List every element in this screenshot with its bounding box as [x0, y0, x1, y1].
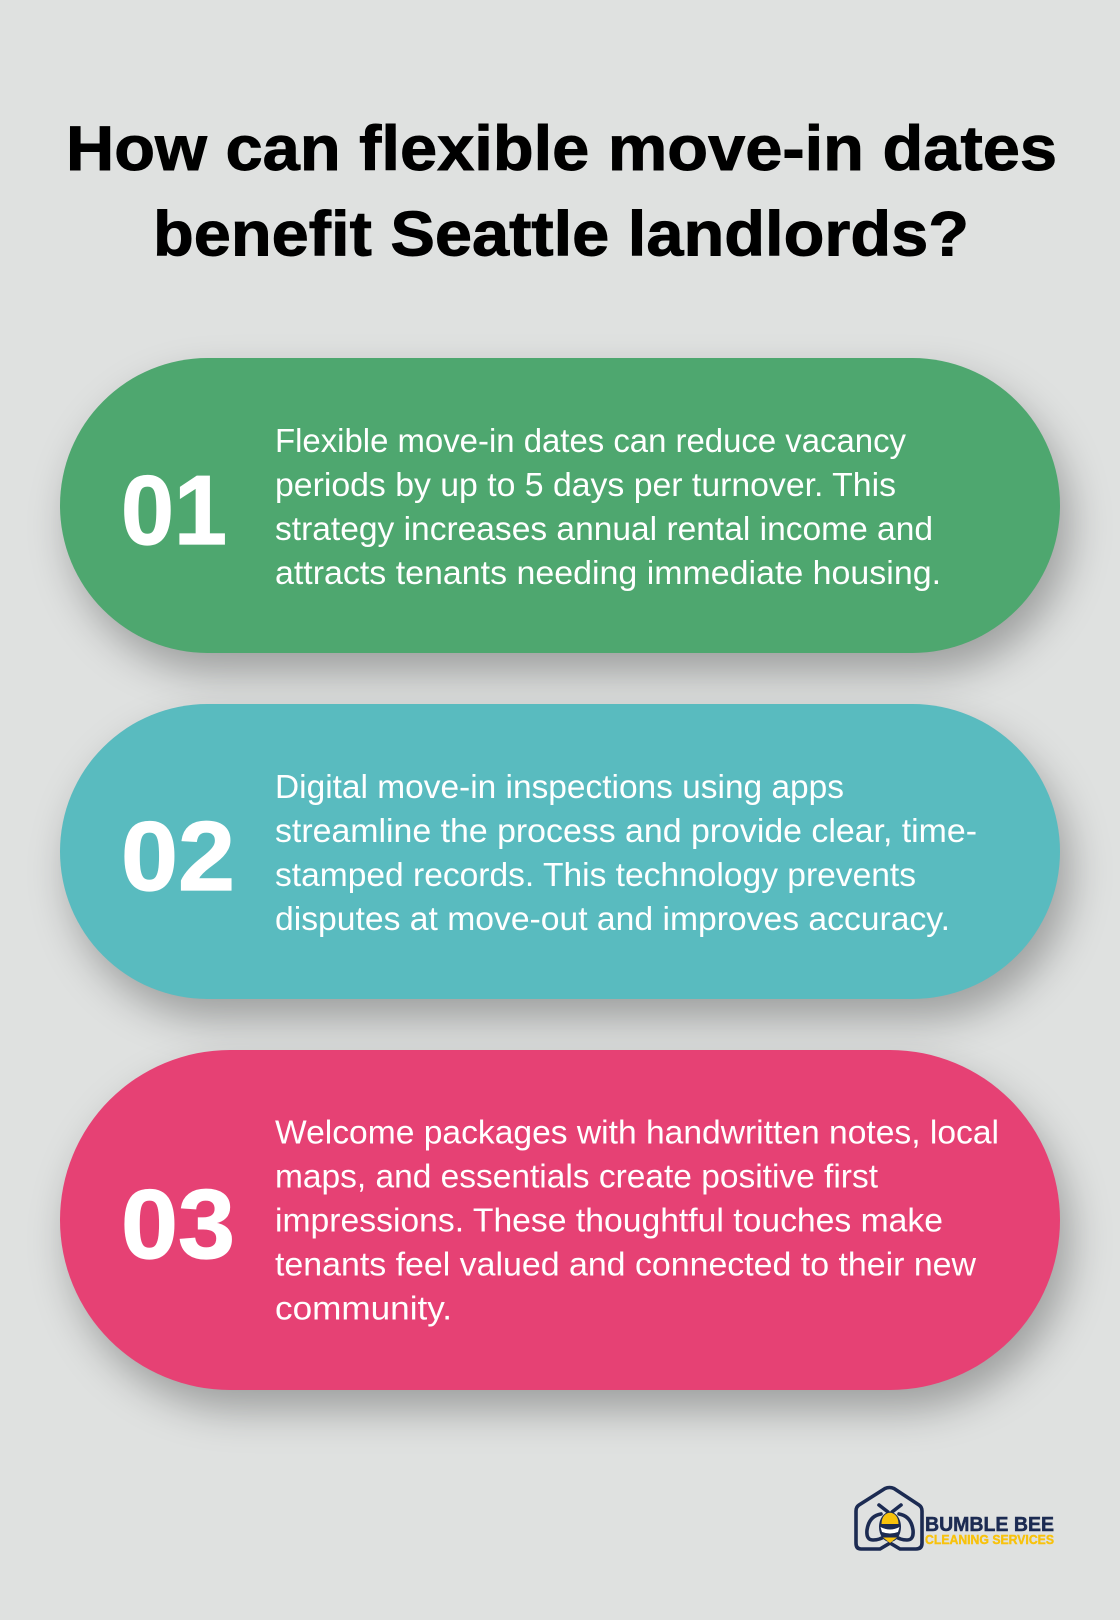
- text block: step 03: maps, and essentials create positive first: [275, 1158, 878, 1194]
- text block: step 01: strategy increases annual rental income and: [275, 510, 933, 547]
- logo: Bumble Bee Cleaning Services: [856, 1488, 1054, 1549]
- title: How can flexible move-in dates: [66, 114, 1057, 184]
- text block: step 03: [275, 1114, 999, 1326]
- panel: step 02: [60, 704, 1060, 999]
- text block: step 02: Digital move-in inspections using apps: [275, 768, 844, 805]
- title: [66, 114, 1057, 270]
- text block: step 03: community.: [275, 1290, 452, 1326]
- number 01: 01: [121, 455, 227, 565]
- pill: teal: [60, 704, 1060, 999]
- number 03: 03: [121, 1169, 235, 1279]
- panel: step 01: [60, 358, 1060, 653]
- text block: step 01: [275, 422, 941, 591]
- text block: step 03: Welcome packages with handwritten notes, local: [275, 1114, 999, 1150]
- wordmark: BUMBLE BEE: [925, 1513, 1054, 1536]
- text block: step 03: impressions. These thoughtful touches make: [275, 1202, 943, 1238]
- panel: step 03: [60, 1050, 1060, 1390]
- text block: step 03: tenants feel valued and connected to their new: [275, 1246, 976, 1282]
- text block: step 01: periods by up to 5 days per turnover. This: [275, 466, 896, 503]
- pill: green: [60, 358, 1060, 653]
- title: benefit Seattle landlords?: [153, 200, 969, 270]
- text block: step 02: stamped records. This technology prevents: [275, 856, 916, 893]
- number 02: 02: [121, 801, 235, 911]
- text block: step 01: Flexible move-in dates can reduce vacancy: [275, 422, 906, 459]
- tagline: CLEANING SERVICES: [925, 1533, 1054, 1547]
- text block: step 02: streamline the process and provide clear, time-: [275, 812, 977, 849]
- icon: house with bee: [856, 1488, 922, 1549]
- text block: step 02: [275, 768, 977, 937]
- text block: step 02: disputes at move-out and improves accuracy.: [275, 900, 950, 937]
- text block: step 01: attracts tenants needing immediate housing.: [275, 554, 941, 591]
- pill: pink: [60, 1050, 1060, 1390]
